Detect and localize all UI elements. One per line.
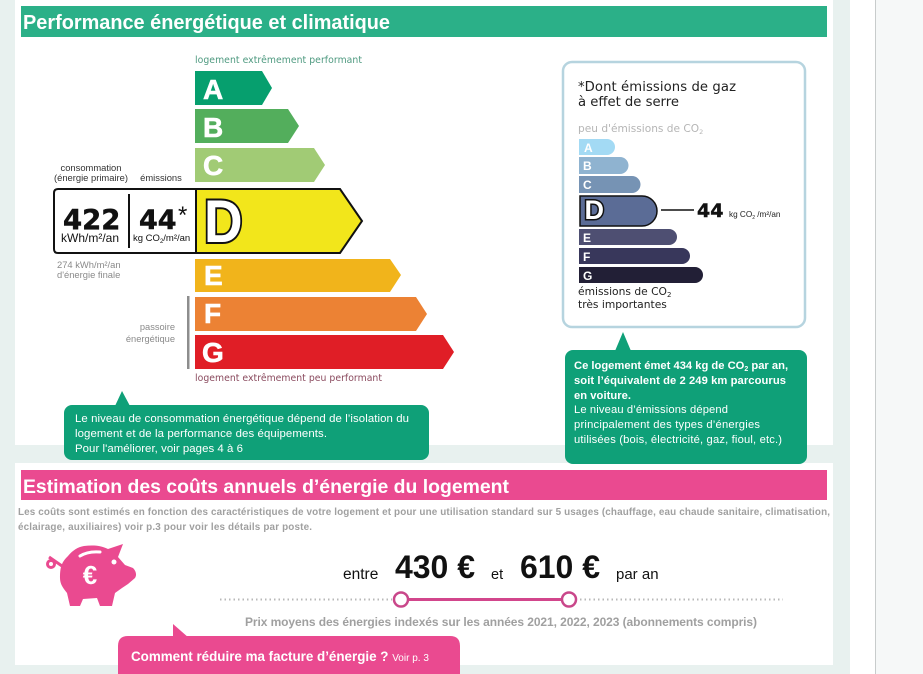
callout: consumption: Le niveau de consommation énergétique dépend de l’isolation du	[75, 413, 409, 425]
label: high emissions	[578, 285, 671, 311]
bar F: F	[204, 298, 221, 329]
current rating: D with values: *	[178, 202, 187, 229]
callout: emissions: soit l’équivalent de 2 249 km parcourus	[574, 375, 786, 387]
emissions scale: F	[583, 250, 590, 264]
emissions value: /m²/an	[755, 210, 781, 219]
cost estimate	[343, 549, 659, 585]
emissions scale: E	[583, 231, 591, 245]
callout: consumption: logement et de la performance des équipements.	[75, 428, 327, 440]
labels above values	[54, 162, 182, 183]
label: passoire énergétique: passoire	[140, 322, 175, 332]
current rating: D with values: 44	[139, 205, 177, 236]
emissions value: 44	[697, 200, 723, 222]
bar G: G	[202, 337, 224, 368]
current rating: D with values: 2	[160, 239, 164, 245]
icon: piggy bank: €	[83, 560, 97, 590]
current rating: D with values: kg CO	[133, 233, 160, 244]
current rating: D with values: /m²/an	[163, 233, 190, 244]
callout: emissions: Ce logement émet 434 kg de CO	[574, 360, 744, 372]
label: high emissions: très importantes	[578, 298, 667, 311]
panel heading	[578, 79, 736, 110]
bar E: E	[204, 260, 223, 291]
emissions scale: A	[584, 141, 593, 155]
label: bottom of energy scale: logement extrêmement peu performant	[195, 373, 382, 384]
final energy note	[57, 259, 121, 280]
heading: performance	[21, 6, 827, 37]
callout: emissions: principalement des types d’énergies	[574, 419, 760, 431]
current rating: D with values	[54, 189, 362, 256]
costs description: Les coûts sont estimés en fonction des caractéristiques de votre logement et pour une utilisation standard sur 5 usages (chauffage, eau chaude sanitaire, climatisation,	[18, 507, 830, 518]
price note: Prix moyens des énergies indexés sur les années 2021, 2022, 2023 (abonnements compris)	[245, 615, 757, 629]
emissions scale	[579, 139, 703, 283]
letter D: D	[204, 189, 243, 256]
panel: greenhouse gas emissions	[563, 62, 805, 327]
bar C	[195, 148, 325, 182]
label: top of energy scale: logement extrêmement performant	[195, 55, 362, 66]
label: passoire énergétique	[126, 296, 190, 369]
heading: costs	[21, 470, 827, 500]
callout: emissions: 2	[744, 366, 748, 373]
bar A: A	[203, 74, 223, 105]
emissions scale: C	[583, 178, 592, 192]
panel heading: *Dont émissions de gaz	[578, 79, 736, 95]
current rating: D with values: 422	[63, 204, 120, 236]
bar D	[196, 189, 362, 253]
cost estimate: et	[491, 567, 503, 583]
cost estimate: 610 €	[520, 549, 600, 585]
callout: emissions: par an,	[748, 360, 788, 372]
heading: costs: Estimation des coûts annuels d’énergie du logement	[23, 476, 509, 498]
bar G	[195, 335, 454, 369]
panel heading: à effet de serre	[578, 94, 679, 110]
emissions scale: D	[584, 195, 604, 225]
heading: performance: Performance énergétique et climatique	[23, 12, 390, 34]
labels above values: (énergie primaire)	[54, 172, 128, 183]
emissions value: 2	[752, 215, 755, 221]
label: high emissions: émissions de CO	[578, 285, 667, 298]
labels above values: consommation	[61, 162, 121, 173]
callout: emissions: utilisées (bois, électricité, gaz, fioul, etc.)	[574, 434, 782, 446]
bar B: B	[203, 112, 223, 143]
values box	[54, 189, 196, 253]
callout: reduce bill: Comment réduire ma facture d’énergie ? Voir p. 3	[131, 649, 429, 664]
cost estimate: par an	[616, 566, 659, 583]
label: low emissions: peu d'émissions de CO	[578, 123, 699, 135]
emissions scale: G	[583, 269, 592, 283]
labels above values: émissions	[140, 172, 182, 183]
callout: emissions: en voiture.	[574, 390, 631, 402]
emissions value: kg CO	[729, 210, 752, 219]
label: high emissions: 2	[667, 291, 671, 299]
callout: emissions: Le niveau d’émissions dépend	[574, 404, 728, 416]
bar E	[195, 259, 401, 292]
cost estimate: entre	[343, 566, 378, 583]
final energy note: d'énergie finale	[57, 269, 120, 280]
icon: piggy bank	[48, 544, 136, 606]
emissions value	[661, 200, 781, 222]
callout: emissions	[565, 332, 807, 464]
callout: reduce bill	[118, 624, 460, 674]
label: low emissions: 2	[699, 128, 703, 136]
callout: consumption: Pour l'améliorer, voir pages 4 à 6	[75, 443, 243, 455]
callout: consumption	[64, 391, 429, 460]
cost range slider	[220, 592, 783, 606]
bar A	[195, 71, 272, 105]
final energy note: 274 kWh/m²/an	[57, 259, 121, 270]
bar F	[195, 297, 427, 331]
energy scale: bars A to G	[195, 71, 454, 369]
cost estimate: 430 €	[395, 549, 475, 585]
bar C: C	[203, 150, 223, 181]
emissions scale: B	[583, 159, 592, 173]
costs description: éclairage, auxiliaires) voir p.3 pour voir les détails par poste.	[18, 522, 312, 533]
label: passoire énergétique: énergétique	[126, 334, 175, 344]
bar B	[195, 109, 299, 143]
current rating: D with values: kWh/m²/an	[61, 231, 119, 245]
costs description	[18, 507, 830, 533]
